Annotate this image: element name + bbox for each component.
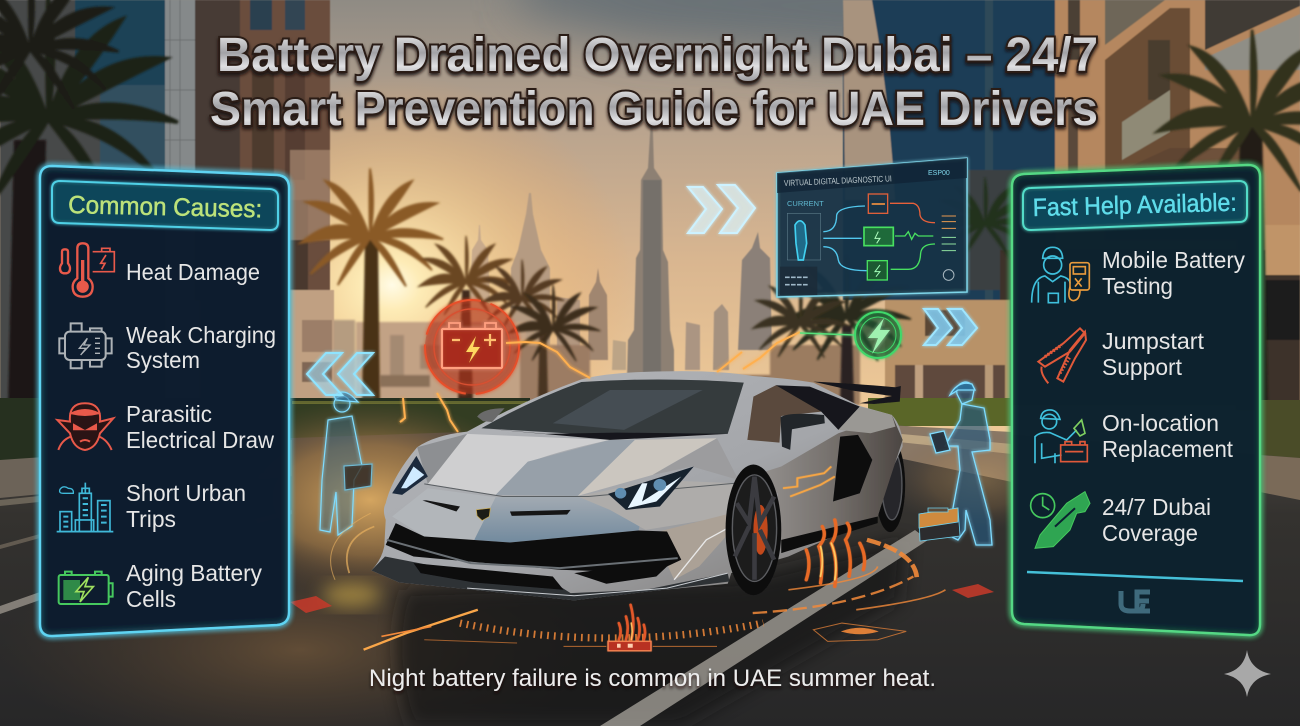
skyline — [470, 100, 772, 378]
panel: common causes — [40, 166, 289, 636]
right mirror — [781, 414, 825, 450]
text: short urban trips: Trips — [126, 506, 176, 532]
text: 24/7 dubai coverage: 24/7 Dubai — [1102, 494, 1211, 520]
side panel — [738, 415, 903, 546]
left mirror — [477, 408, 505, 422]
car body shell — [371, 371, 903, 600]
text: jumpstart support: Jumpstart — [1102, 328, 1205, 354]
text: parasitic electrical draw — [126, 401, 274, 453]
distant low buildings — [330, 320, 860, 405]
hood highlights — [428, 434, 610, 495]
current label: CURRENT — [787, 199, 824, 208]
icon: mobile battery testing — [1032, 247, 1089, 303]
text: short urban trips: Short Urban — [126, 480, 246, 506]
text: weak charging system: Weak Charging — [126, 322, 276, 348]
text: aging battery cells: Aging Battery — [126, 560, 262, 586]
red battery warning icon — [425, 300, 519, 394]
car ground shadow — [396, 540, 905, 726]
rear wheel — [875, 438, 905, 532]
icon: 24/7 coverage map — [1031, 492, 1090, 548]
diagnostic status: ESP00 — [928, 170, 950, 177]
text: parasitic electrical draw: Parasitic — [126, 401, 212, 427]
hood vents — [422, 500, 460, 512]
chevron arrows left — [307, 353, 373, 395]
chevron arrows upper right — [688, 185, 755, 233]
windshield — [481, 379, 744, 436]
battery case — [344, 464, 372, 490]
text: mobile battery testing — [1102, 247, 1245, 299]
hedges — [0, 398, 1300, 460]
title: Battery Drained Overnight Dubai – 24/7 — [217, 29, 1098, 82]
diagnostic panel title: VIRTUAL DIGITAL DIAGNOSTIC UI — [784, 173, 892, 188]
left buildings — [0, 0, 334, 420]
white lane stripe — [600, 530, 928, 726]
side window — [747, 385, 821, 443]
icon: parasitic draw vampire — [57, 403, 113, 450]
title: Smart Prevention Guide for UAE Drivers — [210, 83, 1098, 136]
text: aging battery cells — [126, 560, 262, 612]
road lane markings — [0, 592, 40, 614]
icon: short urban trips — [57, 483, 113, 532]
heading: common causes: Common Causes: — [68, 191, 262, 223]
text: jumpstart support: Support — [1102, 354, 1183, 380]
heading: fast help: Fast Help Available: — [1032, 189, 1237, 222]
warning tag — [608, 641, 651, 651]
text: aging battery cells: Cells — [126, 586, 176, 612]
text: parasitic electrical draw: Electrical Draw — [126, 427, 274, 453]
left headlight — [392, 456, 428, 495]
icon: weak charging system — [59, 323, 112, 368]
icon: heat damage — [60, 243, 114, 297]
side circuit glow — [783, 467, 835, 497]
road and sidewalk — [0, 424, 1300, 726]
virtual diagnostic panel — [777, 158, 967, 297]
front grille and lower bumper — [386, 523, 681, 573]
heat flames — [608, 520, 865, 651]
panel: fast help — [1012, 165, 1260, 635]
left hologram technician — [320, 392, 372, 535]
yellow ground glow — [322, 583, 382, 607]
icon: on-location replacement — [1035, 410, 1087, 463]
front wheel — [726, 465, 781, 595]
text: 24/7 dubai coverage: Coverage — [1102, 520, 1198, 546]
text: on-location replacement: Replacement — [1102, 436, 1234, 462]
badge — [476, 508, 490, 521]
tablet — [930, 431, 950, 453]
right hologram technician — [930, 382, 992, 545]
hood crease — [424, 483, 735, 497]
heat rings on road — [331, 513, 945, 650]
flames under bumper — [619, 605, 645, 640]
header box: fast help — [1023, 181, 1247, 230]
text: short urban trips — [126, 480, 246, 532]
text: on-location replacement: On-location — [1102, 410, 1219, 436]
sports car — [371, 371, 905, 600]
spoiler — [813, 382, 901, 404]
text: 24/7 dubai coverage — [1102, 494, 1211, 546]
right headlight — [608, 467, 694, 510]
side air intake — [833, 435, 872, 502]
text: jumpstart support — [1102, 328, 1205, 380]
chevron arrows lower right — [924, 309, 977, 345]
lightning arcs — [400, 332, 800, 432]
logo mark — [1121, 591, 1150, 611]
palm trees — [0, 0, 1300, 410]
text: on-location replacement — [1102, 410, 1234, 462]
sill — [781, 517, 878, 553]
text: heat damage: Heat Damage — [126, 259, 260, 285]
text: mobile battery testing: Testing — [1102, 273, 1173, 299]
text: weak charging system: System — [126, 347, 200, 373]
icon: aging battery — [59, 572, 113, 604]
header box: common causes — [52, 181, 278, 230]
title — [210, 29, 1098, 136]
flames at side sill — [806, 520, 865, 586]
circuit diagram — [780, 194, 956, 295]
icon: sparkle — [1224, 650, 1271, 697]
text: weak charging system — [126, 322, 276, 373]
orange toolbox — [919, 508, 960, 541]
green lightning circle — [800, 312, 901, 358]
text: mobile battery testing: Mobile Battery — [1102, 247, 1245, 273]
caption: Night battery failure is common in UAE summer heat. — [369, 665, 936, 692]
red warning tags on road — [290, 584, 994, 613]
right buildings — [843, 0, 1300, 405]
icon: jumpstart clamp — [1038, 328, 1086, 383]
